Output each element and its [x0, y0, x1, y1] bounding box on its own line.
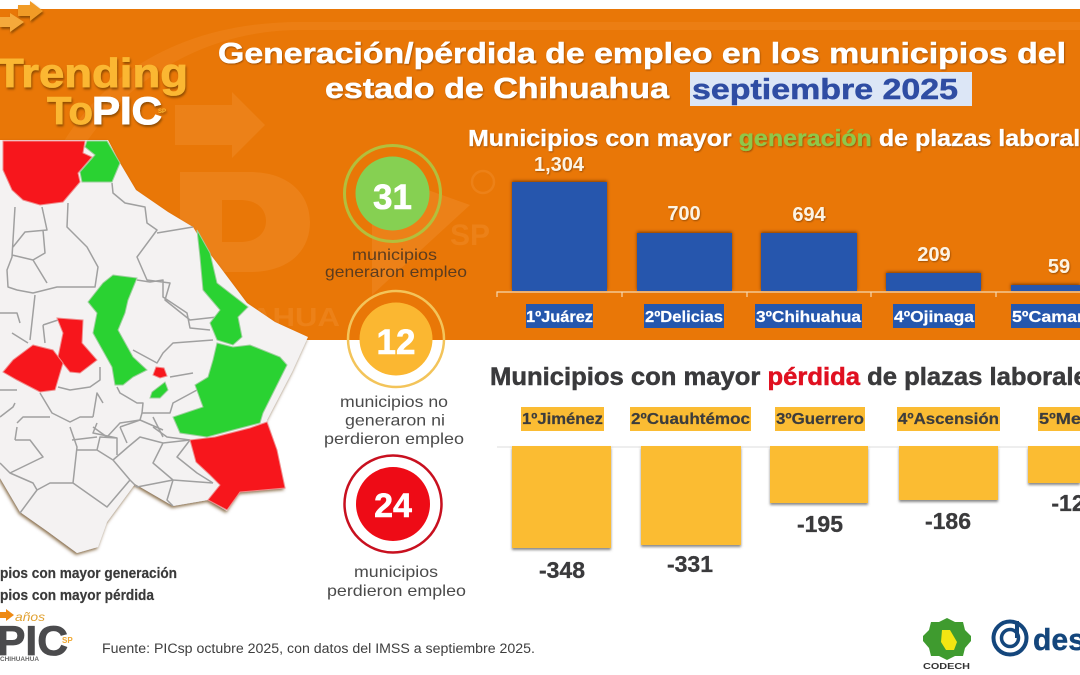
logo: Trending ToPIC: SP	[158, 109, 166, 115]
heading: generation: Municipios con mayor generación de plazas laborales	[468, 125, 1080, 151]
logo: desarrollo	[994, 621, 1080, 657]
generation values: 700	[667, 203, 701, 225]
generation labels	[526, 304, 1080, 328]
green municipality: large east	[173, 343, 287, 437]
map base outline	[0, 140, 308, 553]
loss labels: 2ºCuauhtémoc	[631, 411, 750, 428]
title: Generación/pérdida de empleo en los municipios del	[218, 38, 1066, 70]
loss values: -195	[797, 511, 843, 537]
logo: CODECH: CODECH	[923, 661, 970, 671]
green municipality: north border	[80, 141, 120, 182]
stat: 31 municipalities generated jobs: generaron empleo	[325, 264, 467, 281]
red municipality: small center	[153, 367, 167, 378]
stat: 12 municipalities no change: generaron ni	[345, 412, 445, 430]
map legend: pios con mayor pérdida	[0, 588, 155, 604]
stat: 24 municipalities lost jobs	[327, 456, 466, 600]
stat: 31 municipalities generated jobs	[325, 146, 467, 281]
generation labels: 1ºJuárez	[526, 309, 593, 326]
stat: 12 municipalities no change: perdieron empleo	[324, 431, 464, 448]
loss values: -348	[539, 557, 585, 583]
map legend	[0, 566, 177, 604]
green municipality: eastern strip	[197, 230, 248, 345]
stat: 12 municipalities no change: municipios no	[340, 394, 448, 411]
stat: 24 municipalities lost jobs: 24	[374, 487, 412, 525]
green municipality: central	[88, 275, 147, 385]
title	[218, 38, 1066, 106]
stat: 24 municipalities lost jobs: perdieron empleo	[327, 583, 466, 600]
watermark: PIC logo	[15, 22, 1080, 340]
stat: 12 municipalities no change: 12	[377, 323, 415, 362]
loss values	[539, 490, 1080, 583]
loss labels	[521, 407, 1080, 431]
loss values: -186	[925, 508, 971, 534]
generation labels: 2ºDelicias	[645, 309, 723, 326]
logo: Trending ToPIC: Trending	[0, 50, 188, 96]
loss labels: 4ºAscensión	[898, 411, 999, 428]
logo: CODECH	[923, 618, 971, 671]
logo: Trending ToPIC: PIC	[92, 90, 162, 133]
red municipality: southeast	[190, 422, 285, 510]
generation labels: 3ºChihuahua	[756, 309, 861, 326]
watermark: PIC logo: AHUA	[250, 302, 340, 332]
loss labels: 5ºMe	[1039, 411, 1080, 428]
bar chart: loss	[497, 407, 1080, 583]
loss labels: 1ºJiménez	[522, 411, 603, 428]
orange header band	[0, 9, 1080, 340]
stat: 31 municipalities generated jobs: 31	[373, 178, 412, 217]
logo: PIC sp: SP	[62, 636, 73, 645]
heading: loss: Municipios con mayor pérdida de plazas laborales	[490, 363, 1080, 391]
logo: PIC sp: años	[15, 610, 45, 624]
map of Chihuahua municipalities	[0, 140, 308, 553]
logo: Trending ToPIC	[0, 1, 188, 133]
stat: 24 municipalities lost jobs: municipios	[354, 564, 438, 581]
title date highlight: septiembre 2025	[692, 74, 958, 106]
logo: PIC sp: CHIHUAHUA	[0, 656, 39, 663]
red municipalities: west	[57, 318, 97, 373]
loss values: -331	[667, 551, 713, 577]
watermark: PIC logo: SP	[450, 219, 490, 252]
generation values: 209	[917, 244, 951, 266]
stat: 31 municipalities generated jobs: municipios	[352, 247, 437, 264]
generation values: 59	[1048, 256, 1070, 278]
stat: 12 municipalities no change	[324, 291, 464, 448]
generation labels: 4ºOjinaga	[894, 309, 974, 326]
red municipality: north	[3, 141, 92, 205]
logo: Trending ToPIC: To	[47, 90, 93, 133]
generation labels: 5ºCamar	[1012, 309, 1080, 326]
municipal borders	[0, 183, 217, 513]
generation values: 694	[792, 204, 827, 226]
title: estado de Chihuahua	[325, 73, 670, 105]
generation values	[534, 154, 1070, 278]
generation values: 1,304	[534, 154, 585, 176]
bar chart: generation	[497, 154, 1080, 328]
source note: Fuente: PICsp octubre 2025, con datos del IMSS a septiembre 2025.	[102, 641, 535, 656]
loss labels: 3ºGuerrero	[776, 411, 864, 428]
green municipality: small	[150, 382, 168, 398]
map legend: pios con mayor generación	[0, 566, 177, 582]
